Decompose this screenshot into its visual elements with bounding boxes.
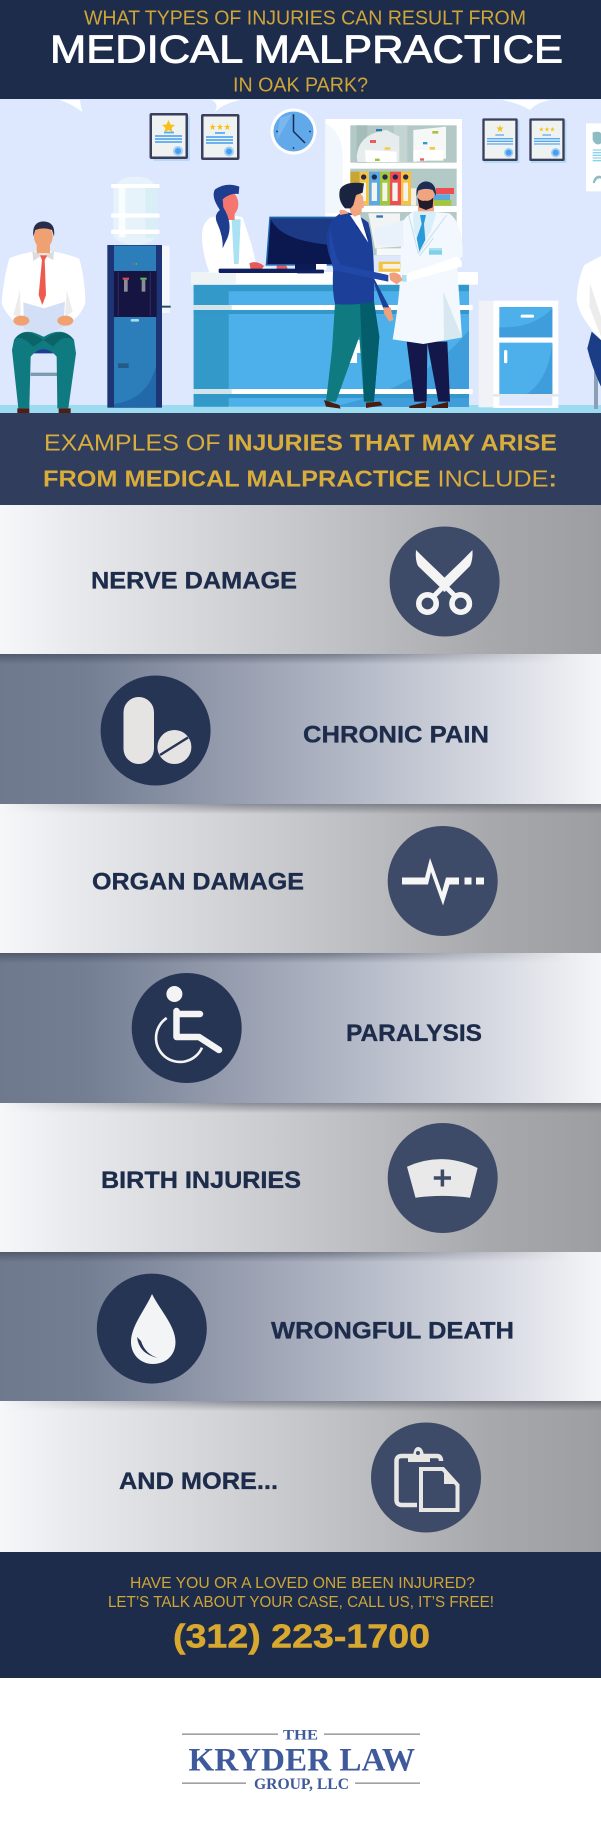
title: medical malpractice: MEDICAL MALPRACTICE xyxy=(50,28,563,72)
header line: what types of injuries: WHAT TYPES OF INJURIES CAN RESULT FROM xyxy=(84,8,526,30)
icon: blood drop xyxy=(97,1274,207,1384)
heading line 1: EXAMPLES OF INJURIES THAT MAY ARISE xyxy=(44,430,557,456)
seated man with newspaper, water cooler and receptionist xyxy=(2,177,302,413)
medical shelf unit xyxy=(325,119,462,272)
call to action panel xyxy=(0,1552,601,1678)
band: chronic pain xyxy=(0,654,601,804)
computer monitor xyxy=(266,217,336,273)
keyboard xyxy=(219,269,302,273)
certificates right: ★ xyxy=(496,124,505,135)
cta line 1: HAVE YOU OR A LOVED ONE BEEN INJURED? xyxy=(130,1575,475,1592)
label: birth injuries: BIRTH INJURIES xyxy=(101,1167,301,1194)
icon: scissors xyxy=(390,526,500,636)
header panel xyxy=(0,0,601,100)
wall poster xyxy=(586,123,601,191)
patient shaking hands xyxy=(324,183,393,409)
icon: nurse cap xyxy=(388,1123,498,1233)
band: wrongful death xyxy=(0,1252,601,1401)
heading line 2: FROM MEDICAL MALPRACTICE INCLUDE : xyxy=(43,466,557,492)
partially visible man at right edge xyxy=(577,256,601,409)
doctor in white coat xyxy=(374,181,463,408)
label: nerve damage: NERVE DAMAGE xyxy=(91,568,297,594)
seated man xyxy=(2,221,85,413)
band: and more xyxy=(0,1401,601,1552)
certificates left xyxy=(150,113,240,161)
logo: the kryder law group: GROUP, LLC xyxy=(254,1776,349,1793)
illustration: clinic reception scene xyxy=(0,99,601,414)
header line: in oak park: IN OAK PARK? xyxy=(233,74,368,96)
band: nerve damage xyxy=(0,505,601,654)
certificates right xyxy=(482,118,566,163)
logo: the kryder law group xyxy=(182,1728,420,1793)
icon: clipboard and document xyxy=(371,1422,481,1532)
phone number: (312) 223-1700 xyxy=(173,1618,430,1654)
wall clock xyxy=(270,108,316,154)
band: birth injuries xyxy=(0,1103,601,1252)
icon: wheelchair xyxy=(132,973,242,1083)
section heading panel xyxy=(0,413,601,505)
water cooler xyxy=(107,177,171,408)
band: paralysis xyxy=(0,953,601,1103)
icon: heartbeat line xyxy=(388,826,498,936)
band: organ damage xyxy=(0,804,601,953)
medical cabinet xyxy=(479,301,558,408)
label: and more: AND MORE... xyxy=(119,1468,278,1495)
shelf, patient, doctor, cabinet and right-hand figures xyxy=(266,118,601,409)
label: organ damage: ORGAN DAMAGE xyxy=(92,868,304,896)
logo: the kryder law group: KRYDER LAW xyxy=(188,1742,415,1778)
label: wrongful death: WRONGFUL DEATH xyxy=(271,1318,514,1344)
icon: pills xyxy=(101,676,211,786)
logo: the kryder law group: THE xyxy=(283,1728,318,1744)
label: chronic pain: CHRONIC PAIN xyxy=(303,722,489,748)
cta line 2: LET’S TALK ABOUT YOUR CASE, CALL US, IT’S FREE! xyxy=(108,1594,494,1611)
certificates left: ★★★ xyxy=(209,122,231,132)
receptionist xyxy=(202,185,287,273)
label: paralysis: PARALYSIS xyxy=(346,1020,482,1047)
counter desk xyxy=(191,272,478,407)
certificates right: ★★★ xyxy=(539,126,555,134)
